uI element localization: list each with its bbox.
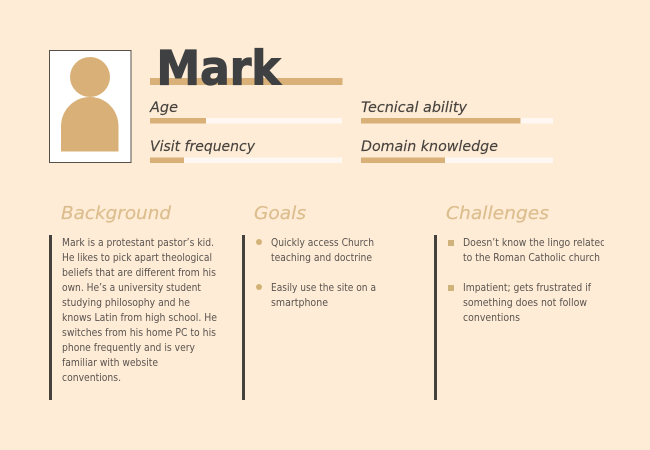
text block: background: switches from his home PC to his <box>62 326 216 339</box>
rating: domain knowledge: Domain knowledge <box>361 139 498 155</box>
text block: goal 2: Easily use the site on a <box>271 281 376 294</box>
rating: age: Age <box>149 100 178 116</box>
text block: challenge 1: to the Roman Catholic church <box>463 251 600 264</box>
text block: background: beliefs that are different from his <box>62 266 216 279</box>
rating: domain knowledge <box>361 139 553 163</box>
heading: background: Background <box>61 203 172 224</box>
bullet: challenge 1 <box>448 240 454 246</box>
text block: challenge 1: Doesn’t know the lingo related <box>463 236 606 249</box>
text block: challenge 1 <box>463 238 604 261</box>
bullet: challenge 2 <box>448 285 454 291</box>
bullet: goal 1 <box>256 239 262 245</box>
rating: visit frequency: Visit frequency <box>150 139 256 155</box>
title: name <box>150 42 342 96</box>
text block: background: studying philosophy and he <box>62 296 190 309</box>
rating: age <box>149 100 342 124</box>
title: name: Mark <box>156 42 282 96</box>
text block: background: familiar with website <box>62 356 158 369</box>
panel: goals <box>242 203 380 400</box>
text block: goal 1: teaching and doctrine <box>271 251 372 264</box>
heading: challenges: Challenges <box>446 203 549 224</box>
text block: goal 2: smartphone <box>271 296 328 309</box>
text block: background: conventions. <box>62 371 121 384</box>
text block: challenge 2: conventions <box>463 311 520 324</box>
text block: background: He likes to pick apart theological <box>62 251 212 264</box>
text block: background: own. He’s a university student <box>62 281 202 294</box>
rating: technical ability: Tecnical ability <box>361 100 468 116</box>
rating: technical ability <box>361 100 553 124</box>
text block: challenge 2: something does not follow <box>463 296 587 309</box>
text block: goal 1: Quickly access Church <box>271 236 374 249</box>
bullet: goal 2 <box>256 284 262 290</box>
rating: visit frequency <box>150 139 342 163</box>
icon: person <box>61 57 118 152</box>
panel: challenges <box>434 203 610 400</box>
text block: background: knows Latin from high school. He <box>62 311 217 324</box>
panel: background <box>49 203 220 400</box>
heading: goals: Goals <box>254 203 306 224</box>
text block: background: phone frequently and is very <box>62 341 195 354</box>
text block: challenge 2: Impatient; gets frustrated if <box>463 281 592 294</box>
panel: portrait <box>50 50 131 162</box>
text block: background: Mark is a protestant pastor’s kid. <box>62 236 214 249</box>
